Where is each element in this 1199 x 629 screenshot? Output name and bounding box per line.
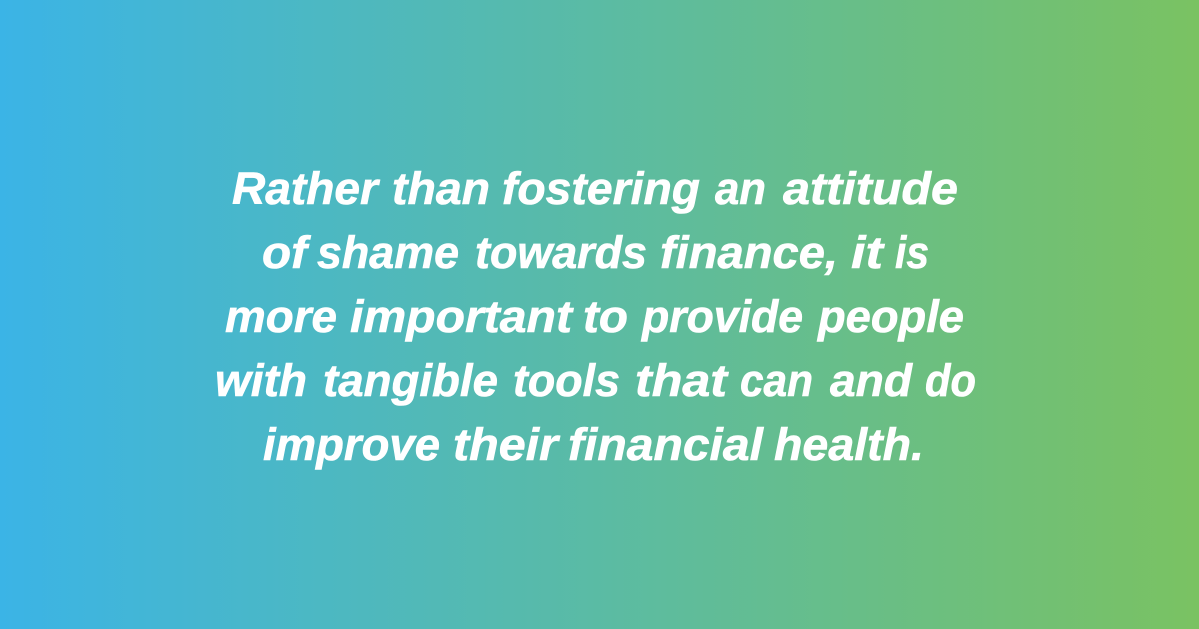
quote line 4: tangible xyxy=(323,355,498,406)
quote line 3 xyxy=(225,291,964,342)
quote line 3: important xyxy=(350,291,574,342)
quote line 4: tools xyxy=(513,355,620,406)
quote line 1: Rather xyxy=(232,163,381,214)
quote line 5: health. xyxy=(774,419,924,470)
quote line 2: towards xyxy=(475,227,647,278)
quote line 3: more xyxy=(225,291,337,342)
quote line 2 xyxy=(262,227,929,278)
quote line 4: do xyxy=(925,355,976,406)
quote line 5: improve xyxy=(263,419,440,470)
quote line 1: an xyxy=(715,163,766,214)
quote line 5: their xyxy=(453,419,561,470)
quote line 4: can xyxy=(740,355,813,406)
quote line 2: of xyxy=(262,227,311,278)
quote line 1: attitude xyxy=(783,163,958,214)
quote line 1 xyxy=(232,163,958,214)
quote line 1: fostering xyxy=(502,163,700,214)
quote line 5 xyxy=(263,419,924,470)
quote line 3: people xyxy=(817,291,964,342)
quote line 1: than xyxy=(392,163,490,214)
quote line 4: and xyxy=(830,355,914,406)
quote line 4: that xyxy=(635,355,729,406)
quote line 3: provide xyxy=(641,291,803,342)
quote line 2: finance, xyxy=(660,227,838,278)
quote line 2: is xyxy=(895,227,929,278)
quote line 2: it xyxy=(851,227,885,278)
quote line 5: financial xyxy=(568,419,765,470)
quote line 4: with xyxy=(215,355,307,406)
quote line 4 xyxy=(215,355,976,406)
quote line 3: to xyxy=(583,291,628,342)
quote line 2: shame xyxy=(317,227,459,278)
